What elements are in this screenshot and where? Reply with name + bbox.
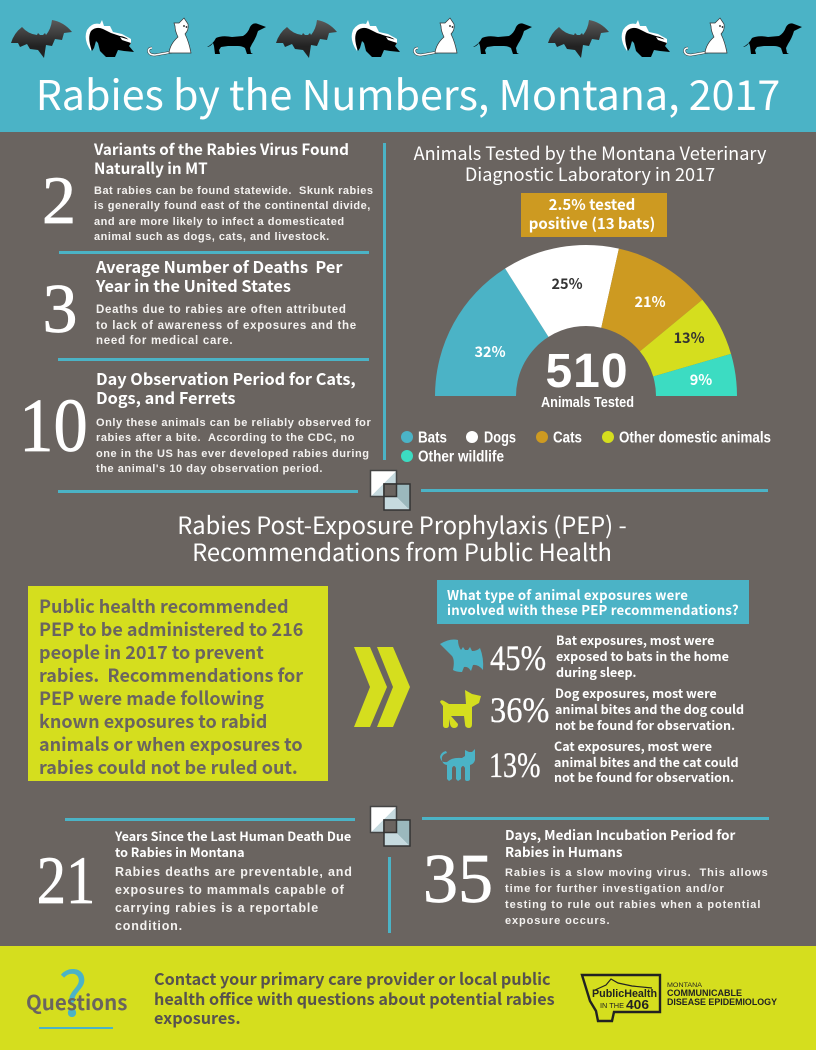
- contact text: exposures.: [154, 1005, 241, 1029]
- stat: 3 deaths: [42, 254, 357, 348]
- heading: [94, 138, 349, 178]
- percent: 13%: [489, 745, 540, 785]
- icon: dog: [440, 690, 481, 728]
- row: bat exposures: [440, 630, 729, 681]
- number 10: 10: [19, 384, 88, 468]
- question text: [447, 584, 739, 619]
- stat: 21 years: [37, 826, 353, 933]
- description: [556, 630, 729, 681]
- segment: cats: [601, 249, 702, 351]
- number 3: 3: [42, 271, 78, 348]
- contact text: Contact your primary care provider or local public: [154, 966, 551, 990]
- heading: Average Number of Deaths Per: [96, 254, 342, 278]
- callout: 2.5% positive: [521, 193, 667, 237]
- segment: bats: [435, 268, 548, 396]
- segment: dogs: [505, 245, 619, 337]
- heading: Days, Median Incubation Period for: [505, 824, 735, 844]
- body: Deaths due to rabies are often attributed: [96, 304, 347, 316]
- percent labels: 13%: [673, 327, 705, 348]
- body: carrying rabies is a reportable: [115, 901, 319, 915]
- description: not be found for observation.: [554, 767, 734, 786]
- body: [94, 185, 374, 243]
- logo: Public Health in the 406: MONTANA: [667, 983, 702, 989]
- body: Rabies is a slow moving virus. This allows: [505, 867, 769, 879]
- icon: overlapping squares: [370, 806, 411, 847]
- body: one in the US has ever developed rabies during: [96, 448, 369, 460]
- legend: Bats: [418, 430, 447, 446]
- callout: 2.5% positive: positive (13 bats): [529, 213, 655, 234]
- body: the animal's 10 day observation period.: [96, 463, 323, 475]
- icon: chevrons arrow: [354, 647, 410, 727]
- logo: Public Health in the 406: COMMUNICABLE: [667, 988, 742, 998]
- logo: Public Health in the 406: [580, 974, 777, 1022]
- callout: PEP recommendation: [28, 586, 328, 781]
- callout text: known exposures to rabid: [39, 708, 267, 734]
- callout text: people in 2017 to prevent: [39, 639, 264, 665]
- chart title: Diagnostic Laboratory in 2017: [465, 161, 715, 187]
- percent labels: 32%: [474, 341, 506, 362]
- chart title: Animals Tested by the Montana Veterinary: [414, 140, 766, 166]
- body: [96, 304, 357, 347]
- heading: [96, 254, 342, 296]
- header band: [0, 0, 816, 132]
- legend: [401, 430, 771, 466]
- heading: Dogs, and Ferrets: [96, 384, 235, 408]
- contact text: health office with questions about potential rabies: [154, 986, 555, 1010]
- description: during sleep.: [556, 662, 636, 681]
- description: Bat exposures, most were: [556, 630, 714, 649]
- row: dog exposures: [440, 683, 744, 734]
- question text: What type of animal exposures were: [447, 584, 688, 604]
- gauge chart: [435, 245, 737, 411]
- body: to lack of awareness of exposures and the: [96, 320, 357, 332]
- logo: Public Health in the 406: 406: [626, 997, 649, 1012]
- legend: Dogs: [484, 430, 516, 446]
- callout text: PEP to be administered to 216: [39, 616, 303, 642]
- heading: to Rabies in Montana: [115, 842, 245, 861]
- percent labels: [474, 273, 712, 390]
- segment: other domestic: [640, 300, 731, 376]
- footer band: [0, 946, 816, 1050]
- body: condition.: [115, 919, 183, 933]
- contact text: [154, 966, 555, 1029]
- stat: 10 day observation: [19, 366, 371, 475]
- body: rabies after a bite. According to the CDC, no: [96, 432, 355, 444]
- body: is generally found east of the continental divide,: [94, 200, 371, 212]
- description: exposed to bats in the home: [556, 646, 729, 665]
- number 35: 35: [423, 841, 493, 918]
- title: Rabies by the Numbers, Montana, 2017: [36, 62, 780, 122]
- callout text: animals or when exposures to: [39, 731, 303, 757]
- icon: cat: [440, 749, 475, 781]
- body: testing to rule out rabies when a potential: [505, 899, 761, 911]
- body: animal such as dogs, cats, and livestock.: [94, 231, 330, 243]
- percent: 45%: [490, 638, 546, 678]
- body: Bat rabies can be found statewide. Skunk rabies: [94, 185, 374, 197]
- row: cat exposures: [440, 736, 739, 786]
- body: exposures to mammals capable of: [115, 883, 345, 897]
- description: Cat exposures, most were: [554, 736, 712, 755]
- callout text: rabies. Recommendations for: [39, 662, 303, 688]
- logo: Public Health in the 406: DISEASE EPIDEMIOLOGY: [667, 997, 777, 1007]
- legend: Cats: [553, 430, 582, 446]
- body: Only these animals can be reliably observed for: [96, 416, 371, 428]
- heading: Variants of the Rabies Virus Found: [94, 138, 349, 160]
- segment: other wildlife: [653, 354, 737, 396]
- heading: Rabies in Humans: [505, 841, 622, 861]
- stat: 35 days: [423, 824, 769, 927]
- box: exposure question: [437, 580, 749, 624]
- body: [96, 416, 371, 475]
- total caption: Animals Tested: [541, 394, 634, 411]
- description: [555, 683, 744, 734]
- body: and are more likely to infect a domesticated: [94, 216, 345, 228]
- logo: Public Health in the 406: IN THE: [600, 1003, 624, 1010]
- callout text: [39, 593, 304, 780]
- body: [505, 867, 769, 927]
- heading: Day Observation Period for Cats,: [96, 366, 356, 390]
- heading: [505, 824, 736, 861]
- chart title: [414, 140, 766, 187]
- questions label: Questions: [26, 986, 127, 1016]
- number 2: 2: [42, 162, 76, 238]
- body: time for further investigation and/or: [505, 883, 725, 895]
- heading: [96, 366, 356, 408]
- body: [115, 865, 353, 933]
- icon: bat: [440, 640, 484, 672]
- body: Rabies deaths are preventable, and: [115, 865, 353, 879]
- question text: involved with these PEP recommendations?: [447, 600, 739, 619]
- percent: 36%: [490, 690, 549, 730]
- PEP heading: [177, 507, 627, 568]
- description: [554, 736, 739, 786]
- legend: Other wildlife: [418, 448, 504, 466]
- description: animal bites and the cat could: [554, 752, 739, 770]
- heading: Years Since the Last Human Death Due: [115, 826, 351, 845]
- animal silhouettes row: [11, 18, 802, 58]
- stat: 2 variants: [42, 138, 374, 243]
- callout text: rabies could not be ruled out.: [39, 754, 298, 780]
- body: exposure occurs.: [505, 915, 610, 927]
- heading: Naturally in MT: [94, 156, 208, 178]
- total 510: 510: [545, 345, 629, 398]
- heading: [115, 826, 351, 861]
- description: animal bites and the dog could: [555, 699, 744, 718]
- heading: Year in the United States: [96, 272, 291, 296]
- description: Dog exposures, most were: [555, 683, 717, 702]
- percent labels: 25%: [551, 273, 583, 294]
- logo: Public Health in the 406: PublicHealth: [592, 988, 657, 1000]
- percent labels: 21%: [634, 291, 666, 312]
- number 21: 21: [37, 842, 95, 918]
- body: need for medical care.: [96, 335, 233, 347]
- PEP heading: Rabies Post-Exposure Prophylaxis (PEP) -: [177, 507, 627, 541]
- percent labels: 9%: [690, 369, 712, 390]
- callout text: PEP were made following: [39, 685, 264, 711]
- callout: 2.5% positive: 2.5% tested: [549, 194, 635, 215]
- PEP heading: Recommendations from Public Health: [192, 534, 612, 568]
- icon: overlapping squares: [370, 470, 411, 511]
- callout text: Public health recommended: [39, 593, 289, 619]
- icon: question mark: ?: [58, 944, 88, 1034]
- description: not be found for observation.: [555, 715, 735, 734]
